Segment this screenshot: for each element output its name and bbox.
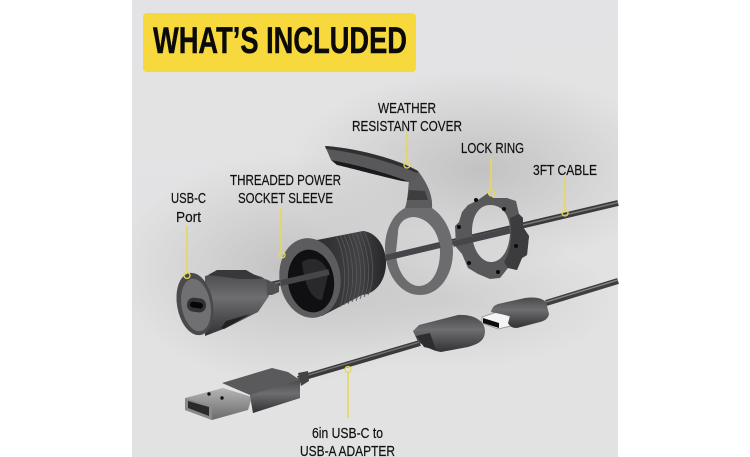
- callout: Threaded Power Socket Sleeve: [230, 173, 341, 258]
- infographic: [132, 0, 619, 457]
- panel: background: [132, 0, 618, 457]
- title badge: WHAT’S INCLUDED: [153, 20, 407, 61]
- callout: Lock Ring: [461, 141, 524, 196]
- title badge: [143, 13, 416, 72]
- component: weather resistant cover: [325, 146, 453, 295]
- component: lock ring: [453, 193, 529, 279]
- callout: Threaded Power Socket Sleeve: THREADED POWER: [230, 173, 341, 189]
- callout: USB-C Port: USB-C: [171, 191, 206, 207]
- component: threaded power socket sleeve: [274, 231, 386, 322]
- callout: 6in USB-C to USB-A Adapter: 6in USB-C to: [312, 426, 383, 442]
- callout: 6in USB-C to USB-A Adapter: [300, 366, 395, 457]
- component: USB-C to USB-A adapter: [185, 280, 618, 420]
- callout: USB-C Port: Port: [176, 210, 201, 226]
- callout: 3ft Cable: 3FT CABLE: [533, 163, 597, 179]
- callout: Weather Resistant Cover: RESISTANT COVER: [352, 119, 462, 135]
- callout: Weather Resistant Cover: [352, 101, 462, 168]
- callout: 3ft Cable: [533, 163, 597, 216]
- callout: Threaded Power Socket Sleeve: SOCKET SLEEVE: [238, 191, 333, 207]
- component: 3ft cable: [268, 202, 618, 286]
- callout: Weather Resistant Cover: WEATHER: [378, 101, 436, 117]
- callout: USB-C Port: [171, 191, 206, 278]
- component: USB-C port: [172, 270, 279, 338]
- callout: Lock Ring: LOCK RING: [461, 141, 524, 157]
